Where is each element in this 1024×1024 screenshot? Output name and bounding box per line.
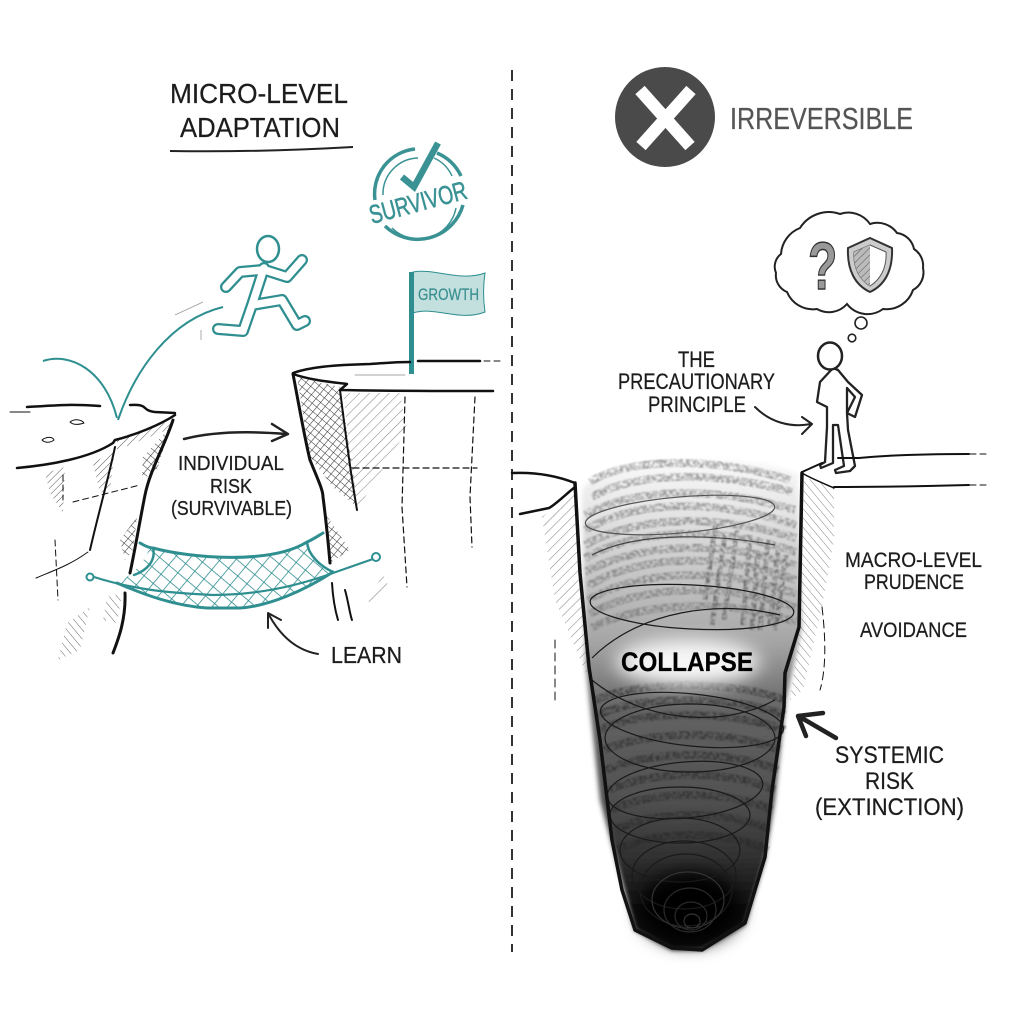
center dashed divider: [511, 70, 513, 952]
label: individual risk: (SURVIVABLE): [171, 498, 292, 520]
label: the precautionary principle with arrow: [618, 347, 812, 434]
runner figure: [218, 236, 305, 331]
thinking person: [817, 342, 862, 473]
heading: micro-level adaptation: ADAPTATION: [180, 112, 340, 143]
survivor stamp: SURVIVOR: [366, 175, 470, 230]
abyss pit: [582, 459, 802, 950]
label: avoidance: AVOIDANCE: [860, 619, 967, 642]
label: systemic risk with arrow: (EXTINCTION): [815, 794, 964, 821]
label: the precautionary principle with arrow: PRECAUTIONARY: [618, 369, 775, 394]
growth flag: GROWTH: [418, 285, 479, 304]
label: learn with arrow: LEARN: [331, 642, 402, 668]
safety net: [86, 533, 380, 615]
irreversible icon: [615, 67, 715, 167]
right cliff: [293, 361, 504, 620]
heading: micro-level adaptation: [170, 78, 353, 151]
arrow: gap span: [184, 424, 288, 441]
label: the precautionary principle with arrow: THE: [678, 347, 715, 372]
label: systemic risk with arrow: [798, 713, 964, 821]
label: macro-level prudence: [845, 549, 982, 594]
left cliff: [10, 405, 175, 660]
heading: micro-level adaptation: MICRO-LEVEL: [170, 78, 348, 109]
label: macro-level prudence: PRUDENCE: [864, 571, 964, 594]
pit scribbles: [584, 489, 795, 932]
label: systemic risk with arrow: RISK: [865, 768, 914, 795]
label: individual risk: [171, 453, 292, 520]
label: the precautionary principle with arrow: PRINCIPLE: [648, 392, 746, 417]
pencil shading strokes: [585, 463, 796, 850]
label: systemic risk with arrow: SYSTEMIC: [835, 742, 944, 769]
heading: irreversible: IRREVERSIBLE: [730, 101, 913, 136]
thought cloud: ?: [808, 229, 837, 304]
thought cloud: [775, 212, 923, 342]
label: individual risk: INDIVIDUAL: [178, 453, 284, 475]
jump arc: [43, 302, 223, 420]
growth flag: [409, 271, 485, 374]
label: collapse: COLLAPSE: [621, 647, 753, 677]
survivor stamp: [366, 143, 470, 239]
pit walls and ground edges: [512, 454, 990, 950]
label: learn with arrow: [268, 613, 402, 668]
label: individual risk: RISK: [210, 476, 253, 498]
label: macro-level prudence: MACRO-LEVEL: [845, 549, 982, 572]
